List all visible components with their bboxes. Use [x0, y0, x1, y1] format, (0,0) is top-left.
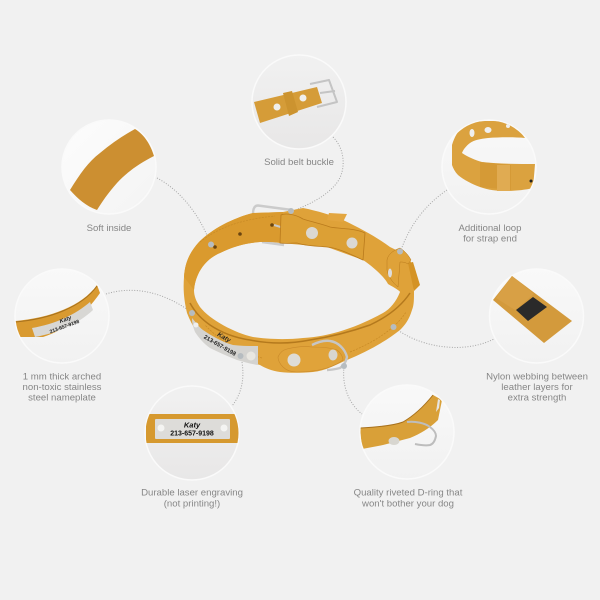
label: D-ring line 2: won't bother your dog [361, 498, 454, 510]
panel: soft inside [62, 120, 156, 214]
label: belt buckle: Solid belt buckle [264, 157, 334, 168]
connector: laser engraving [232, 357, 243, 406]
label: nameplate line 3: steel nameplate [28, 392, 96, 404]
label: additional loop: Additional loop [459, 223, 521, 234]
main collar illustration [184, 206, 420, 373]
label: additional loop line 2: for strap end [463, 234, 517, 244]
label: nylon webbing line 2: leather layers for [501, 382, 574, 393]
label: nameplate: 1 mm thick arched [23, 372, 101, 382]
panel: laser engraving: Katy [184, 420, 201, 430]
panel: belt buckle [252, 55, 346, 149]
panel: laser engraving: 213-657-9198 [170, 430, 214, 438]
connector: belt buckle [293, 137, 343, 211]
label: nylon webbing: Nylon webbing between [486, 372, 588, 382]
stitching [200, 216, 406, 358]
upper strap shading [184, 212, 283, 290]
panel: arched nameplate: Katy [59, 315, 73, 325]
D-ring and tab [278, 341, 347, 372]
label: soft inside: Soft inside [87, 223, 131, 234]
buckle frame [253, 206, 292, 245]
label: nameplate line 2: non-toxic stainless [23, 382, 102, 393]
keeper panel with rivets [280, 213, 365, 260]
steel nameplate [192, 318, 258, 365]
leather sample [493, 276, 572, 343]
adjustment holes and prong [213, 223, 284, 249]
label: laser engraving: Durable laser engraving [141, 488, 243, 498]
panel: laser engraving [145, 386, 240, 480]
panel: nylon webbing [490, 269, 584, 363]
panel: arched nameplate [15, 269, 109, 363]
label: nylon webbing line 3: extra strength [508, 392, 566, 404]
connector: additional loop [401, 190, 447, 250]
collar strap [184, 208, 414, 373]
leather lip edge [190, 293, 410, 343]
strap loop [387, 248, 420, 291]
panel: additional loop [442, 120, 536, 214]
engraved text: Katy [216, 331, 232, 344]
connector: D-ring [344, 367, 362, 414]
connector: soft inside [157, 178, 210, 243]
nylon layer [516, 297, 547, 321]
connector pins [189, 208, 403, 369]
panel: arched nameplate: 213-657-9198 [49, 319, 81, 335]
steel nameplate: 213-657-9198 [202, 335, 237, 358]
connector: nameplate [106, 290, 191, 312]
label: laser engraving line 2: (not printing!) [164, 498, 220, 510]
top leather layer [496, 276, 534, 310]
label: D-ring: Quality riveted D-ring that [354, 488, 463, 498]
connector: nylon webbing [394, 327, 494, 347]
panel: D-ring [360, 385, 454, 479]
